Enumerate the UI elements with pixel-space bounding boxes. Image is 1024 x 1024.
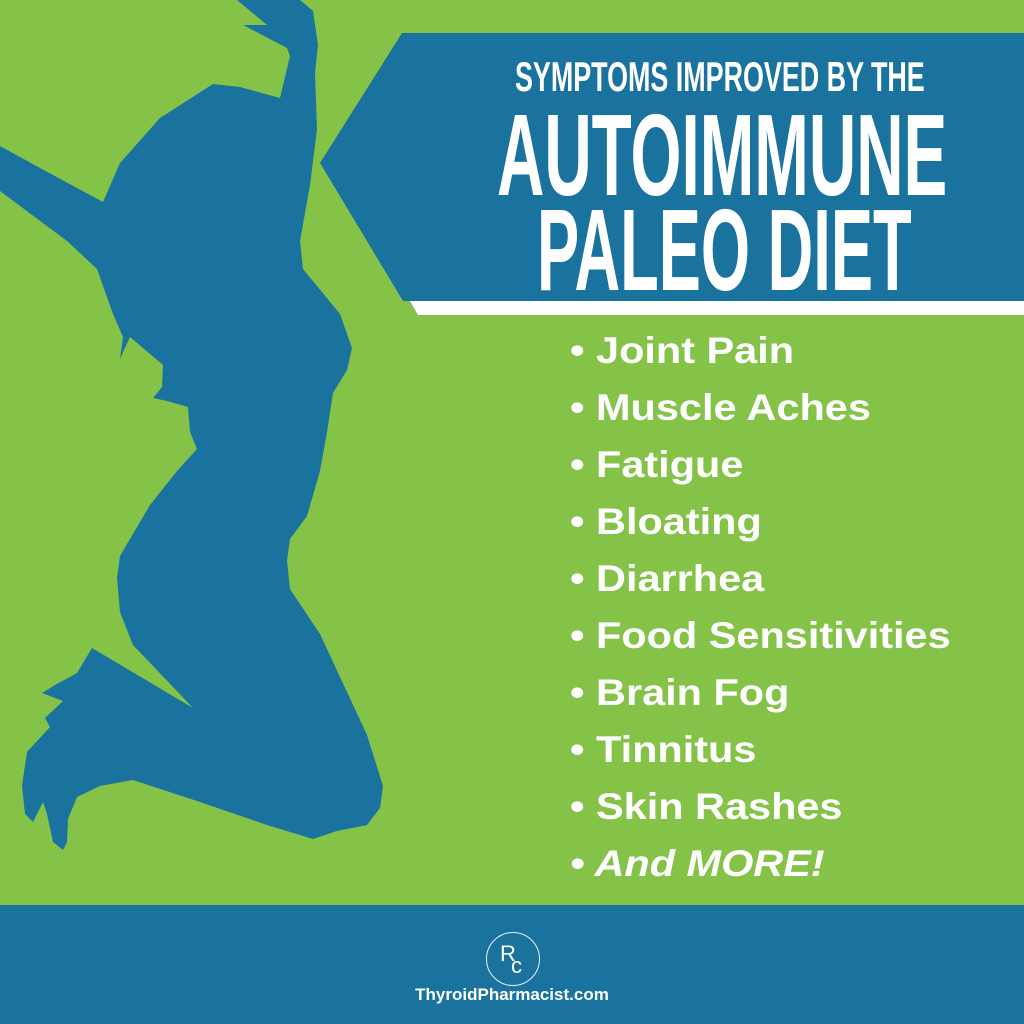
title line 3: PALEO DIET (537, 185, 912, 315)
logo: RC circle: c (511, 953, 522, 978)
symptom list: • Skin Rashes (570, 786, 842, 827)
silhouette: jumping woman (0, 0, 383, 850)
symptom list: • Tinnitus (570, 729, 756, 770)
symptom list: • And MORE! (570, 843, 825, 884)
title banner (320, 33, 1024, 315)
title line 2: AUTOIMMUNE (497, 90, 947, 220)
footer (0, 905, 1024, 1024)
symptom list: • Muscle Aches (570, 387, 871, 428)
symptom list: • Diarrhea (570, 558, 764, 599)
symptom list: • Brain Fog (570, 672, 789, 713)
logo: RC circle: R (500, 941, 516, 966)
symptom list: • Fatigue (570, 444, 743, 485)
title line 1: SYMPTOMS IMPROVED BY THE (515, 53, 925, 100)
symptom list (570, 330, 951, 884)
symptom list: • Bloating (570, 501, 762, 542)
symptom list: • Joint Pain (570, 330, 794, 371)
logo: RC circle (486, 932, 540, 986)
website: ThyroidPharmacist.com (415, 985, 609, 1004)
symptom list: • Food Sensitivities (570, 615, 951, 656)
